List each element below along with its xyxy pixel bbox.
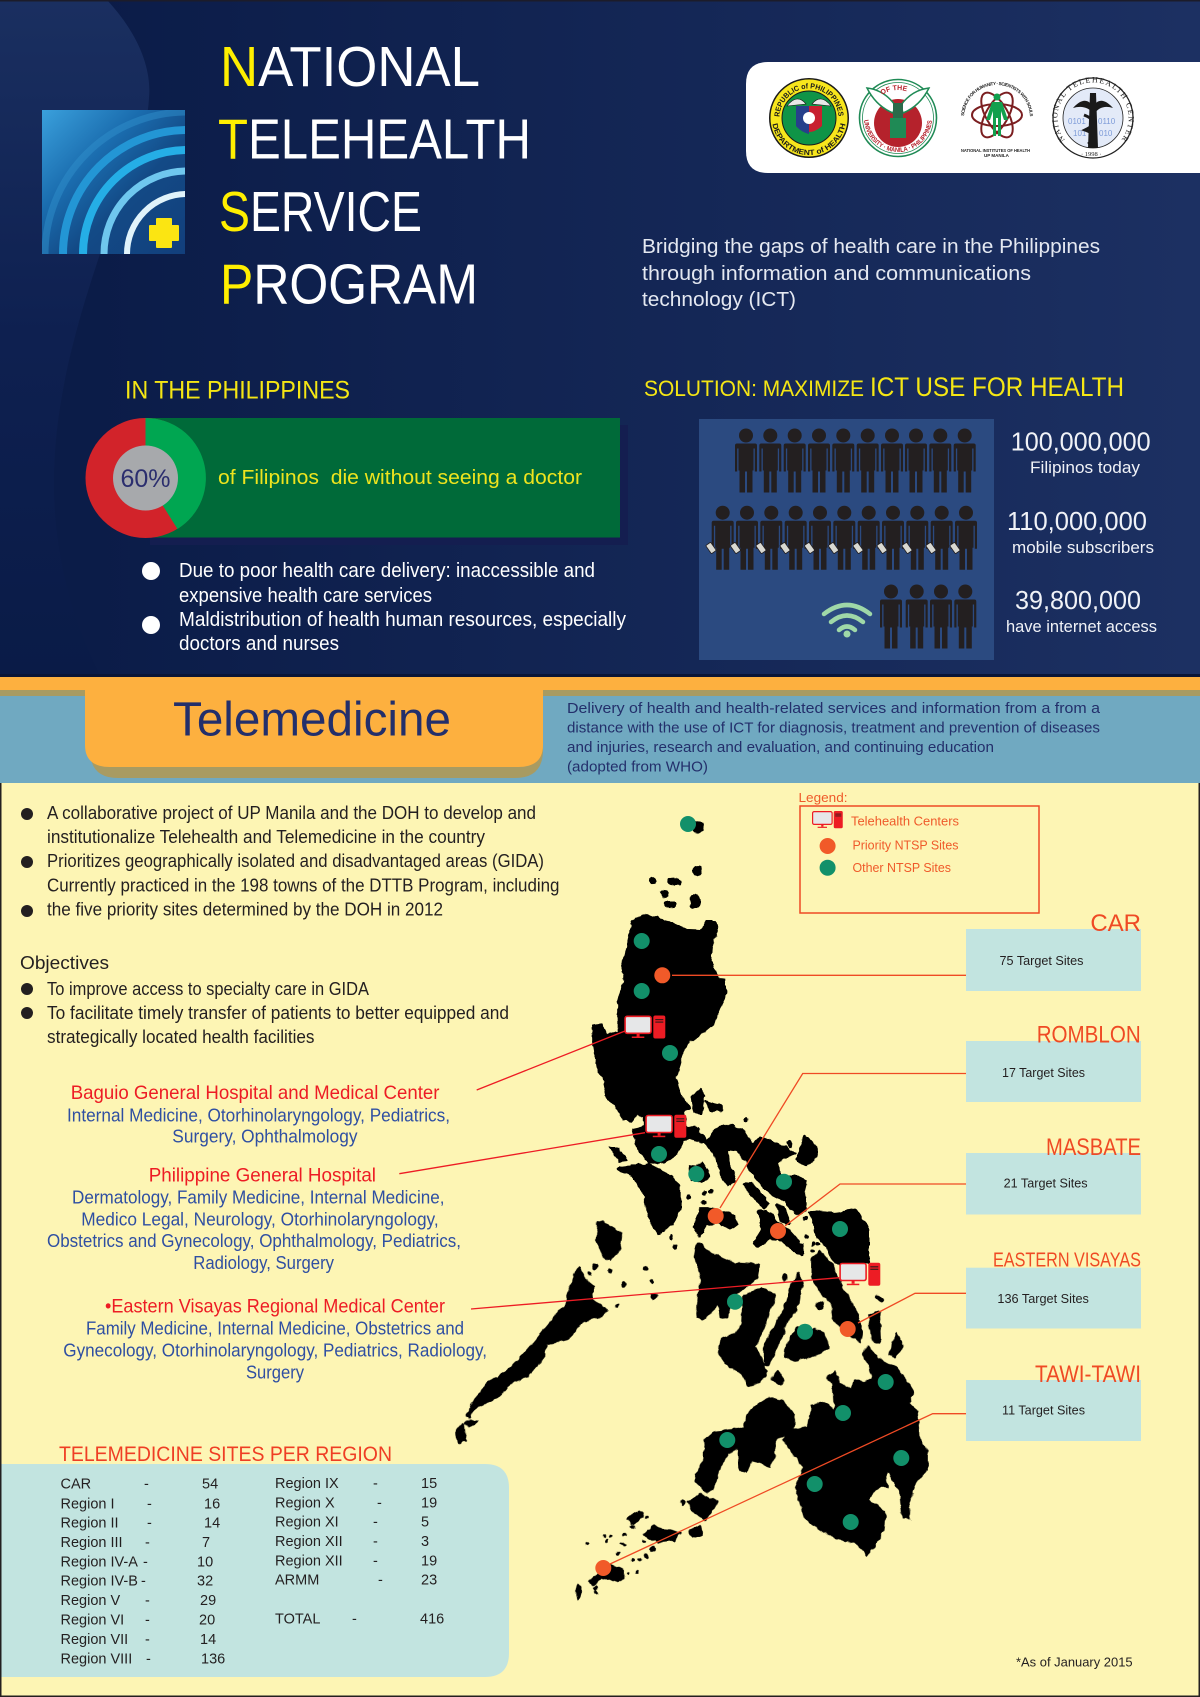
text block: project description: Prioritizes geographically isolated and disadvantaged areas (GIDA) [47,851,544,871]
heading: telemedicine sites per region: TELEMEDICINE SITES PER REGION [59,1443,392,1466]
text block: project description: institutionalize Telehealth and Telemedicine in the country [47,827,485,847]
pictogram row: internet users [880,584,976,648]
icon: National Telehealth Center seal: 010 [1099,129,1113,138]
table column: Region IX to total: 19 [421,1553,437,1569]
text block: project description: Currently practiced in the 198 towns of the DTTB Program, including [47,876,560,896]
table column: CAR to Region VIII: 14 [200,1632,216,1648]
table column: Region IX to total: 5 [421,1515,429,1531]
panel: Tawi-Tawi target sites: 11 Target Sites [1002,1402,1085,1418]
map markers: priority NTSP sites [595,967,856,1576]
panel: Telemedicine header band [0,677,1200,783]
table column: CAR to Region VIII: - [147,1496,152,1512]
icon: National Telehealth Center seal: 0101 [1068,117,1086,126]
title: TELEHEALTH [218,108,531,172]
table column: CAR to Region VIII: 54 [202,1477,218,1493]
panel: Tawi-Tawi target sites: TAWI-TAWI [1035,1361,1141,1388]
text block: Eastern Visayas Regional Medical Center: Family Medicine, Internal Medicine, Obstetrics and [86,1319,464,1339]
legend: Priority NTSP Sites [852,838,959,852]
heading: solution [644,372,1124,402]
table column: CAR to Region VIII: 136 [201,1651,225,1667]
bullet list: health care problems: Maldistribution of health human resources, especially [179,609,626,631]
leader lines to hospitals [399,1031,839,1309]
table column: CAR to Region VIII: Region V [60,1593,120,1609]
panel: Eastern Visayas target sites [966,1250,1141,1328]
table column: CAR to Region VIII: 20 [199,1613,215,1629]
icon: National Institutes of Health emblem: SCIENCE FOR HUMANITY · SCIENTISTS WITH SOULS [961,82,1033,116]
chart: donut 60 percent: 60% [120,465,171,493]
table column: CAR to Region VIII: - [141,1574,146,1590]
table column: Region IX to total: - [378,1573,383,1589]
table column: Region IX to total: Region XII [275,1553,343,1569]
text block: project description [21,803,560,920]
definition text: distance with the use of ICT for diagnosis, treatment and prevention of diseases [567,720,1100,736]
table column: CAR to Region VIII: Region VI [60,1613,124,1629]
icon: National Institutes of Health emblem: NATIONAL INSTITUTES OF HEALTH [961,148,1030,153]
table column: CAR to Region VIII: - [145,1593,150,1609]
icon: National Institutes of Health emblem: UP MANILA [984,153,1010,158]
pictogram row: Filipinos [735,428,976,492]
panel: navy header background [0,0,1200,677]
panel: CAR target sites: CAR [1090,910,1141,937]
table column: CAR to Region VIII: 29 [200,1593,216,1609]
stats: population numbers: 39,800,000 [1015,585,1141,615]
text block: objectives: To improve access to specialty care in GIDA [47,979,369,999]
text block: project description: A collaborative project of UP Manila and the DOH to develop and [47,803,536,823]
table column: CAR to Region VIII: Region IV-A [60,1554,138,1570]
stats: population numbers: Filipinos today [1030,458,1140,477]
panel: 60% statistic banner [86,418,628,545]
title: NATIONAL [220,35,480,99]
map south: Visayas, Palawan and Mindanao [457,1222,927,1600]
panel: Masbate target sites [966,1134,1141,1214]
title: SERVICE [219,180,422,244]
table column: Region IX to total: 23 [421,1573,437,1589]
definition text: (adopted from WHO) [567,760,708,776]
map markers: other NTSP sites [634,816,909,1530]
chart: donut 60 percent [86,418,206,538]
legend: Legend: [798,790,848,805]
table column: Region IX to total: 19 [421,1495,437,1511]
bullet list: health care problems: Due to poor health care delivery: inaccessible and [179,560,595,582]
footnote: *As of January 2015 [1016,1654,1133,1670]
table column: Region IX to total: TOTAL [275,1611,320,1627]
title [218,35,531,316]
leader lines to region boxes [610,975,966,1564]
table column: CAR to Region VIII: - [147,1516,152,1532]
text block: objectives [20,953,509,1047]
table column: CAR to Region VIII: - [144,1477,149,1493]
table column: Region IX to total: - [352,1611,357,1627]
panel: Romblon target sites: ROMBLON [1037,1022,1141,1049]
text block: objectives: Objectives [20,953,109,973]
text block: Baguio General Hospital: Surgery, Ophthalmology [172,1127,358,1147]
table column: Region IX to total: 15 [421,1476,437,1492]
table column: Region IX to total [275,1476,444,1627]
icon: yellow cross [150,219,178,247]
icon: University of the Philippines Manila seal [858,78,938,158]
tagline: Bridging the gaps of health care in the Philippines [642,236,1100,258]
heading: in the Philippines: IN THE PHILIPPINES [125,376,350,404]
icon: Department of Health seal: REPUBLIC of PHILIPPINES [774,83,844,116]
table column: CAR to Region VIII: Region VII [60,1632,128,1648]
icon: National Telehealth Center seal: NATIONAL TELEHEALTH CENTER [1052,77,1134,143]
icon: University of the Philippines Manila seal: OF THE [880,85,908,94]
legend: Telehealth Centers [851,814,959,828]
text block: Philippine General Hospital: Obstetrics and Gynecology, Ophthalmology, Pediatrics, [47,1231,461,1251]
pictogram row: mobile subscribers [706,506,977,570]
table column: CAR to Region VIII: Region III [60,1535,123,1551]
table column: Region IX to total: Region IX [275,1476,339,1492]
table column: Region IX to total: Region XI [275,1515,339,1531]
table column: Region IX to total: Region X [275,1495,335,1511]
text block: Philippine General Hospital: Philippine General Hospital [149,1164,376,1186]
text block: project description: the five priority sites determined by the DOH in 2012 [47,900,443,920]
panel: Romblon target sites [966,1022,1141,1102]
map north: Luzon and nearby islands [593,896,868,1262]
stats: population numbers: mobile subscribers [1012,538,1154,557]
panel: cream map background [0,783,1200,1697]
text block: Baguio General Hospital: Internal Medicine, Otorhinolaryngology, Pediatrics, [67,1105,450,1125]
panel: sites per region table [2,1464,509,1677]
table column: Region IX to total: - [373,1553,378,1569]
panel: Eastern Visayas target sites: EASTERN VISAYAS [993,1250,1141,1272]
heading tab: Telemedicine: Telemedicine [173,694,451,747]
table column: Region IX to total: Region XII [275,1534,343,1550]
text block: Eastern Visayas Regional Medical Center: Surgery [246,1362,304,1382]
panel: partner logos strip [746,62,1200,173]
title: PROGRAM [220,252,478,316]
table column: CAR to Region VIII: Region IV-B [60,1574,138,1590]
icon: telehealth program logo [42,110,185,254]
table column: CAR to Region VIII: 10 [197,1554,213,1570]
table column: Region IX to total: - [373,1476,378,1492]
table column: CAR to Region VIII: CAR [60,1477,91,1493]
icon: Department of Health seal [769,78,849,158]
table column: CAR to Region VIII: 7 [202,1535,210,1551]
table column: Region IX to total: - [377,1495,382,1511]
text block: Philippine General Hospital: Radiology, Surgery [193,1253,334,1273]
heading: solution: ICT USE FOR HEALTH [870,372,1124,402]
text block: objectives: To facilitate timely transfer of patients to better equipped and [47,1003,509,1023]
table column: Region IX to total: - [373,1515,378,1531]
stats: population numbers: 100,000,000 [1011,427,1151,457]
panel: Masbate target sites: MASBATE [1046,1134,1141,1161]
icon: National Telehealth Center seal: · 1998 · [1081,151,1102,158]
text block: Eastern Visayas Regional Medical Center: Gynecology, Otorhinolaryngology, Pediatrics, Radiology, [63,1340,487,1360]
text block: Eastern Visayas Regional Medical Center: •Eastern Visayas Regional Medical Center [105,1295,445,1317]
panel: population pictogram [699,419,994,660]
legend: Other NTSP Sites [852,860,951,875]
table column: Region IX to total: ARMM [275,1573,319,1589]
table column: CAR to Region VIII: - [146,1651,151,1667]
table column: CAR to Region VIII: 14 [204,1516,220,1532]
table column: Region IX to total: 416 [420,1611,444,1627]
definition text: and injuries, research and evaluation, and continuing education [567,740,994,756]
icon: National Institutes of Health emblem [961,82,1033,158]
heading: solution: SOLUTION: MAXIMIZE [644,376,864,401]
text block: Baguio General Hospital [67,1082,450,1147]
icon: National Telehealth Center seal: 0110 [1098,117,1116,126]
stats: population numbers: 110,000,000 [1007,506,1147,536]
icon: University of the Philippines Manila seal: UNIVERSITY · MANILA · PHILIPPINES [864,120,932,152]
table column: CAR to Region VIII: 16 [204,1496,220,1512]
text block: objectives: strategically located health facilities [47,1027,314,1047]
definition text: Delivery of health and health-related services and information from a from a [567,701,1101,717]
text block: Philippine General Hospital: Dermatology, Family Medicine, Internal Medicine, [72,1188,444,1208]
bullet list: health care problems: doctors and nurses [179,633,339,655]
panel: Masbate target sites: 21 Target Sites [1004,1176,1088,1191]
table column: CAR to Region VIII: - [145,1535,150,1551]
table column: CAR to Region VIII: - [145,1613,150,1629]
legend [798,790,1039,913]
table column: Region IX to total: 3 [421,1534,429,1550]
panel: Romblon target sites: 17 Target Sites [1002,1065,1085,1080]
table column: Region IX to total: - [373,1534,378,1550]
tagline: technology (ICT) [642,289,796,311]
table column: CAR to Region VIII: Region II [60,1516,119,1532]
tagline: through information and communications [642,263,1031,285]
map: Philippines [457,821,927,1600]
panel: Eastern Visayas target sites: 136 Target Sites [997,1291,1089,1306]
icon: National Telehealth Center seal: 101 [1073,129,1087,138]
panel: CAR target sites [966,910,1141,991]
text block: Eastern Visayas Regional Medical Center [63,1295,487,1382]
table column: CAR to Region VIII: - [143,1554,148,1570]
icon: Department of Health seal: DEPARTMENT of HEALTH [772,123,846,156]
heading tab: Telemedicine [85,677,543,767]
tagline [642,236,1100,311]
table column: CAR to Region VIII: - [145,1632,150,1648]
stats: population numbers [1006,427,1157,636]
banner text: of Filipinos die without seeing a doctor [218,467,582,489]
panel: CAR target sites: 75 Target Sites [1000,953,1084,968]
icon: wifi [824,605,870,638]
text block: Baguio General Hospital: Baguio General Hospital and Medical Center [71,1082,440,1104]
table column: CAR to Region VIII [60,1477,225,1667]
bullet list: health care problems: expensive health care services [179,585,432,607]
table column: CAR to Region VIII: Region VIII [60,1651,132,1667]
bullet list: health care problems [142,560,626,655]
panel: Tawi-Tawi target sites [966,1361,1141,1441]
table column: CAR to Region VIII: 32 [197,1574,213,1590]
map north islands: Batanes and Babuyan [648,821,705,908]
table column: CAR to Region VIII: Region I [60,1496,115,1512]
text block: Philippine General Hospital: Medico Legal, Neurology, Otorhinolaryngology, [81,1209,439,1229]
stats: population numbers: have internet access [1006,617,1157,636]
text block: Philippine General Hospital [47,1164,461,1273]
definition text [567,701,1101,776]
map markers: telehealth centers [625,1016,880,1286]
